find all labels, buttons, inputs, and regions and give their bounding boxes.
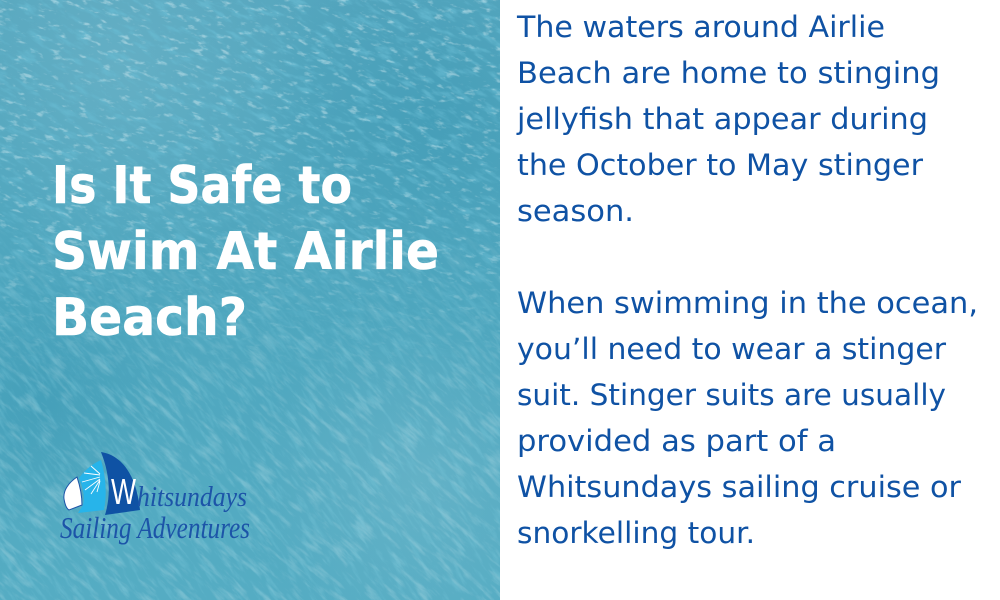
logo wordmark: hitsundays — [137, 481, 247, 513]
text block: jellyfish paragraph: Beach are home to stinging — [517, 56, 940, 90]
text block: stinger suit paragraph: you’ll need to wear a stinger — [517, 332, 947, 366]
text block: stinger suit paragraph — [517, 286, 978, 550]
icon: dark blue sail — [101, 452, 140, 515]
text block: stinger suit paragraph: Whitsundays sailing cruise or — [517, 470, 962, 504]
panel: right text background — [500, 0, 1000, 600]
icon: cyan sail with sun — [78, 460, 106, 513]
text block: stinger suit paragraph: provided as part of a — [517, 424, 836, 458]
logo: Whitsundays Sailing Adventures — [60, 452, 250, 545]
text block: jellyfish paragraph: jellyfish that appear during — [516, 102, 928, 136]
text block: jellyfish paragraph: the October to May stinger — [517, 148, 924, 182]
title — [52, 156, 439, 348]
logo wordmark — [60, 471, 250, 545]
text block: stinger suit paragraph: When swimming in the ocean, — [517, 286, 978, 320]
text block: jellyfish paragraph: season. — [517, 194, 634, 228]
text block: stinger suit paragraph: suit. Stinger suits are usually — [517, 378, 946, 412]
text block: stinger suit paragraph: snorkelling tour. — [517, 516, 755, 550]
text block: jellyfish paragraph: The waters around Airlie — [516, 10, 885, 44]
text block: jellyfish paragraph — [516, 10, 940, 228]
logo wordmark: W — [111, 471, 136, 512]
icon: white sail — [64, 477, 82, 510]
panel: ocean water background — [0, 0, 500, 600]
title: Beach? — [52, 288, 247, 348]
title: Is It Safe to — [52, 156, 352, 216]
logo wordmark: Sailing Adventures — [60, 510, 250, 545]
title: Swim At Airlie — [52, 222, 439, 282]
